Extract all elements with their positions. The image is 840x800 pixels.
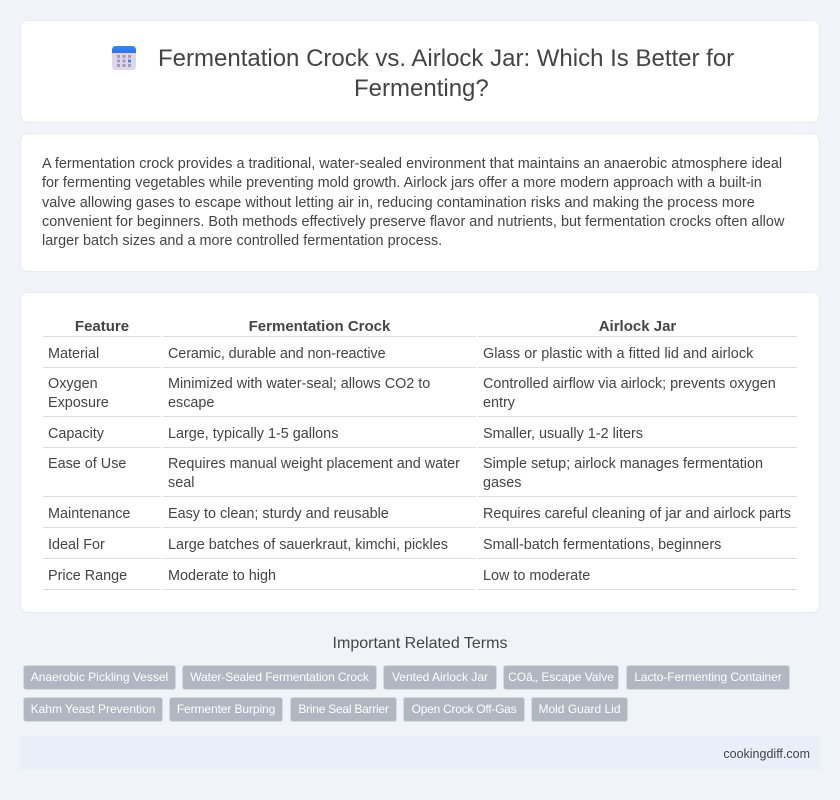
row: Maintenance: Requires careful cleaning of jar and airlock parts: [483, 506, 791, 522]
row: Ease of Use: seal: [168, 475, 194, 491]
row: Maintenance: [48, 506, 791, 522]
tag: Anaerobic Pickling Vessel: [31, 670, 168, 684]
row: Ease of Use: Requires manual weight placement and water: [168, 456, 460, 472]
footer bar: [20, 736, 820, 770]
row: Ease of Use: gases: [483, 475, 521, 491]
row: Price Range: Price Range: [48, 568, 127, 584]
tag: Open Crock Off-Gas: [412, 702, 516, 716]
header card: [20, 20, 820, 123]
text block: intro: convenient for beginners. Both methods effectively preserve flavor and nutrients, but fermentation crocks often allow: [42, 214, 784, 230]
title: Fermentation Crock vs. Airlock Jar: Which Is Better for: [158, 45, 734, 72]
tag: [23, 697, 163, 722]
text block: intro: valve allowing gases to escape without letting air in, reducing contamination risks and making the process more: [42, 195, 755, 211]
tag: [23, 665, 176, 690]
row: Oxygen Exposure: Controlled airflow via airlock; prevents oxygen: [483, 376, 776, 392]
tag: [169, 697, 283, 722]
tag: [503, 665, 619, 690]
row: Oxygen Exposure: Minimized with water-seal; allows CO2 to: [168, 376, 430, 392]
row: Material: [48, 346, 754, 362]
row: Capacity: Large, typically 1-5 gallons: [168, 426, 338, 442]
panel: intro paragraph: [20, 133, 820, 272]
row: Ideal For: [48, 537, 721, 553]
row: Ideal For: Large batches of sauerkraut, kimchi, pickles: [168, 537, 448, 553]
table header: Feature: [75, 318, 129, 335]
row: Maintenance: Easy to clean; sturdy and reusable: [168, 506, 389, 522]
row: Capacity: Capacity: [48, 426, 104, 442]
panel: comparison table: [20, 292, 820, 613]
row: Oxygen Exposure: escape: [168, 395, 214, 411]
tag: Brine Seal Barrier: [298, 702, 389, 716]
table header: [75, 318, 676, 335]
row: Oxygen Exposure: entry: [483, 395, 515, 411]
row: Ease of Use: Simple setup; airlock manages fermentation: [483, 456, 763, 472]
row: Ease of Use: [48, 456, 763, 491]
row: Material: Ceramic, durable and non-reactive: [168, 346, 385, 362]
row: Maintenance: Maintenance: [48, 506, 130, 522]
tag: Kahm Yeast Prevention: [31, 702, 155, 716]
title: Fermenting?: [354, 75, 489, 102]
row: Oxygen Exposure: Exposure: [48, 395, 109, 411]
tag: [290, 697, 397, 722]
tag: Fermenter Burping: [177, 702, 275, 716]
text block: intro: larger batch sizes and a more controlled fermentation process.: [42, 233, 442, 249]
row: Oxygen Exposure: Oxygen: [48, 376, 98, 392]
related term tags: [23, 665, 790, 722]
row: Capacity: [48, 426, 643, 442]
tag: [182, 665, 377, 690]
row: Capacity: Smaller, usually 1-2 liters: [483, 426, 643, 442]
tag: [403, 697, 525, 722]
tag: Mold Guard Lid: [538, 702, 621, 716]
row: Price Range: Moderate to high: [168, 568, 276, 584]
row: Price Range: [48, 568, 590, 584]
tag: [531, 697, 628, 722]
row: Material: Material: [48, 346, 99, 362]
text block: intro: A fermentation crock provides a traditional, water-sealed environment that maintains an anaerobic atmosphere ideal: [42, 156, 782, 172]
tag: COâ‚‚ Escape Valve: [508, 670, 614, 684]
footer source text: cookingdiff.com: [723, 747, 810, 761]
icon: calendar: [112, 46, 136, 70]
tag: [383, 665, 497, 690]
row: Price Range: Low to moderate: [483, 568, 590, 584]
title: [158, 45, 734, 102]
row: Oxygen Exposure: [48, 376, 776, 411]
text block: intro: [42, 156, 784, 249]
table header: Fermentation Crock: [249, 318, 390, 335]
tag: Vented Airlock Jar: [392, 670, 488, 684]
row: Ease of Use: Ease of Use: [48, 456, 126, 472]
table header: Airlock Jar: [599, 318, 676, 335]
row: Ideal For: Ideal For: [48, 537, 105, 553]
row: Ideal For: Small-batch fermentations, beginners: [483, 537, 721, 553]
tag: Water-Sealed Fermentation Crock: [190, 670, 369, 684]
tag: Lacto-Fermenting Container: [634, 670, 782, 684]
tag: [626, 665, 790, 690]
heading: related terms: Important Related Terms: [333, 635, 507, 652]
row: Material: Glass or plastic with a fitted lid and airlock: [483, 346, 753, 362]
text block: intro: for fermenting vegetables while preventing mold growth. Airlock jars offer a more modern approach with a built-in: [42, 175, 762, 191]
